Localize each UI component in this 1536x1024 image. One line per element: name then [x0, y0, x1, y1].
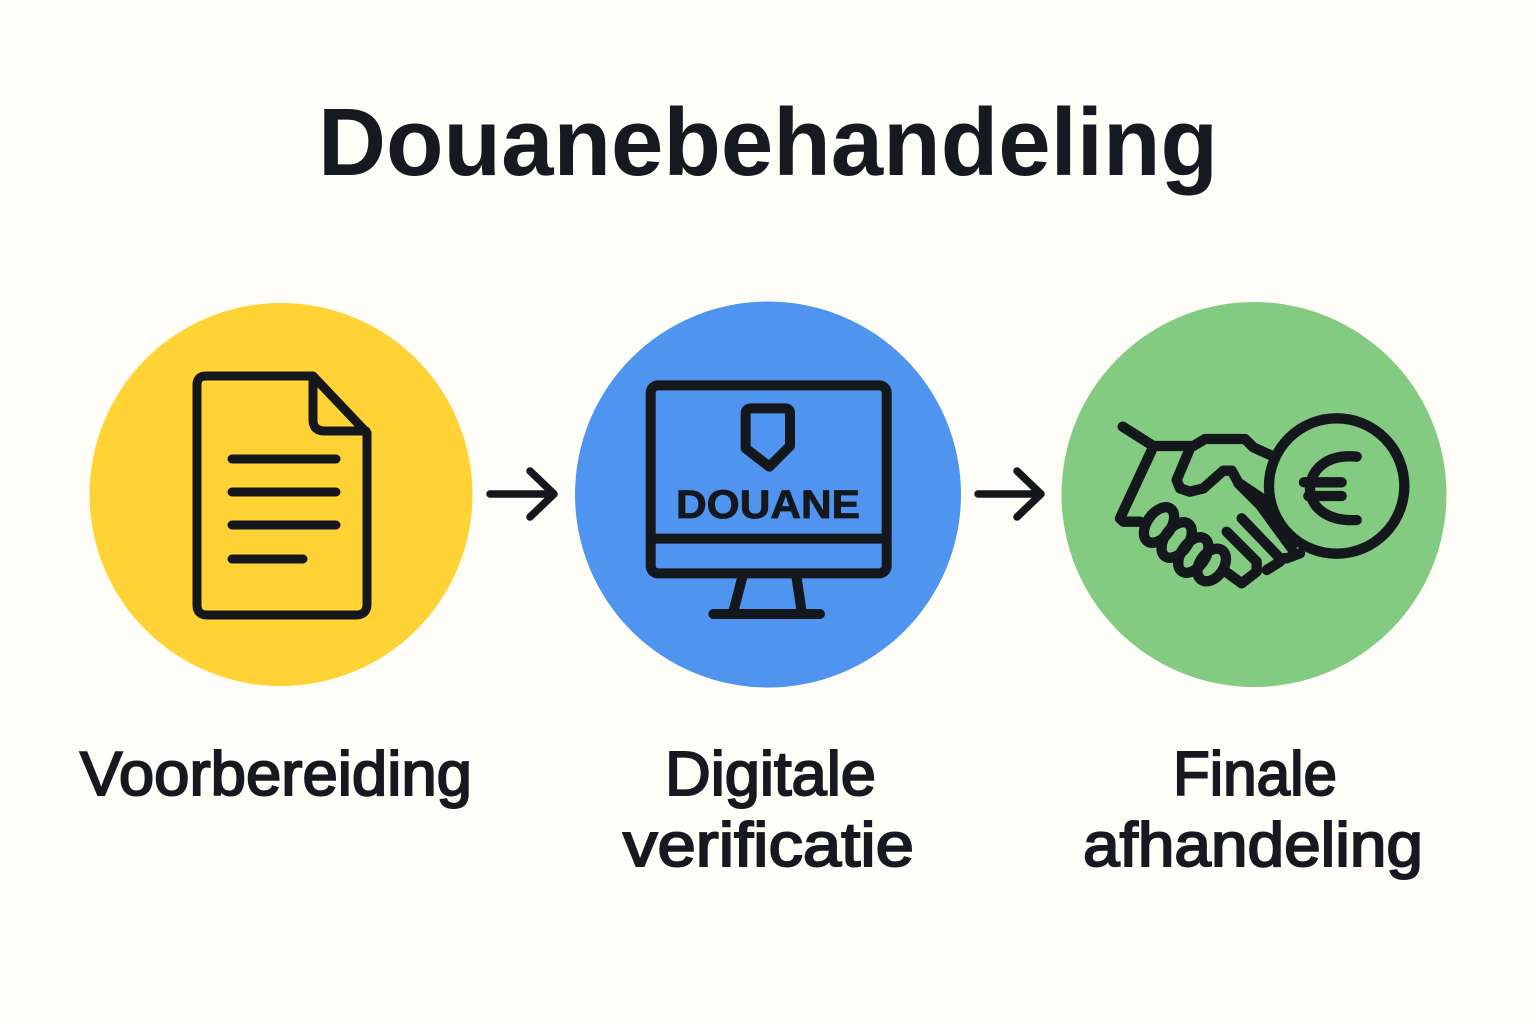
panel: step 2 digitale verificatie — [575, 302, 961, 880]
green circle — [1062, 302, 1446, 687]
icon: computer monitor — [651, 385, 887, 614]
arrow: step 1 to step 2 — [490, 471, 554, 517]
label: Voorbereiding: Voorbereiding — [80, 740, 472, 809]
label: Finale afhandeling — [1083, 740, 1423, 880]
panel: step 3 finale afhandeling — [1062, 302, 1446, 880]
icon: document — [197, 376, 367, 615]
label: Digitale verificatie — [623, 740, 914, 880]
text: DOUANE: DOUANE — [676, 483, 860, 527]
label: Finale afhandeling: afhandeling — [1083, 811, 1423, 880]
label: Digitale verificatie: verificatie — [623, 811, 914, 880]
arrow: step 2 to step 3 — [978, 471, 1041, 517]
label: Finale afhandeling: Finale — [1173, 740, 1337, 809]
panel: step 1 voorbereiding — [80, 303, 472, 809]
icon: handshake with euro coin — [1120, 418, 1404, 587]
blue circle — [575, 302, 961, 688]
yellow circle — [90, 303, 472, 686]
title: Douanebehandeling — [318, 89, 1218, 196]
label: Digitale verificatie: Digitale — [665, 740, 876, 809]
